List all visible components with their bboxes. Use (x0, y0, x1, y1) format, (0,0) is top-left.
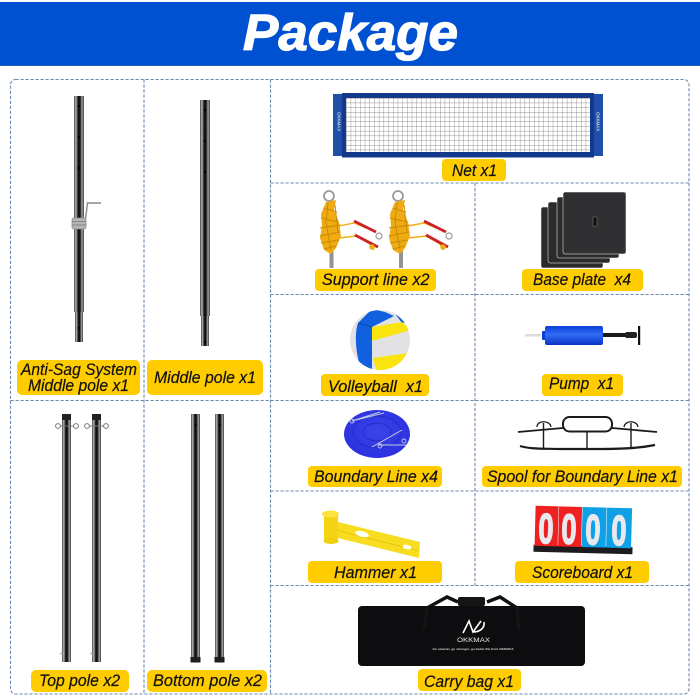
panel: middle pole (147, 100, 263, 395)
panel: scoreboard (515, 505, 649, 583)
icon: boundary line spool (344, 410, 410, 458)
icon: scoreboard (533, 505, 634, 554)
panel: bottom pole (147, 414, 267, 692)
panel: spool (482, 417, 682, 487)
label: top pole: Top pole x2 (39, 672, 120, 690)
panel: hammer (308, 510, 442, 583)
panel: pump (525, 326, 640, 396)
icon: scoreboard: 0 (561, 505, 577, 553)
icon: carry bag: Go smarter, go stronger, go better life from OKKMAX (432, 647, 514, 651)
icon: net: OKKMAX (336, 112, 342, 131)
label: scoreboard: Scoreboard x1 (532, 564, 633, 582)
label: middle pole (147, 360, 263, 395)
panel: base plate (522, 192, 643, 291)
label: anti-sag system: Anti-Sag System (20, 361, 137, 379)
title: Package (243, 4, 458, 61)
label: bottom pole: Bottom pole x2 (153, 672, 262, 690)
icon: carry bag (358, 597, 585, 666)
icon: support lines (320, 191, 452, 268)
icon: pump (525, 326, 640, 345)
panel: boundary line (308, 410, 442, 487)
label: net: Net x1 (452, 162, 497, 180)
icon: net: OKKMAX (596, 112, 600, 131)
icon: base plates (541, 192, 626, 268)
label: spool: Spool for Boundary Line x1 (487, 468, 678, 486)
label: carry bag: Carry bag x1 (424, 673, 514, 691)
icon: scoreboard: 0 (538, 505, 554, 552)
icon: scoreboard: 0 (611, 507, 627, 554)
icon: hammer (322, 510, 420, 558)
label: volleyball: Volleyball x1 (328, 378, 423, 396)
icon: spool frame (518, 417, 657, 449)
panel: net (333, 93, 603, 181)
icon: carry bag: OKKMAX (457, 638, 490, 644)
label: hammer: Hammer x1 (334, 564, 417, 582)
panel: volleyball (321, 309, 429, 396)
title banner (0, 2, 700, 66)
panel: top pole (31, 414, 129, 692)
label: pump: Pump x1 (549, 375, 614, 393)
icon: scoreboard: 0 (585, 506, 601, 553)
panel: carry bag (358, 597, 585, 691)
panel: support line (315, 191, 452, 291)
label: support line: Support line x2 (322, 271, 430, 289)
icon: net (333, 93, 603, 158)
icon: middle pole (200, 100, 210, 346)
label: anti-sag system (17, 360, 140, 395)
label: net (442, 159, 506, 181)
icon: two top poles (56, 414, 108, 662)
label: middle pole: Middle pole x1 (154, 369, 256, 387)
icon: volleyball (350, 309, 411, 372)
panel: anti-sag middle pole (17, 96, 140, 395)
icon: two bottom poles (190, 414, 224, 662)
icon: anti-sag pole with winch (72, 96, 101, 342)
label: base plate: Base plate x4 (533, 271, 631, 289)
label: anti-sag system: Middle pole x1 (28, 377, 129, 395)
label: boundary line: Boundary Line x4 (314, 468, 438, 486)
